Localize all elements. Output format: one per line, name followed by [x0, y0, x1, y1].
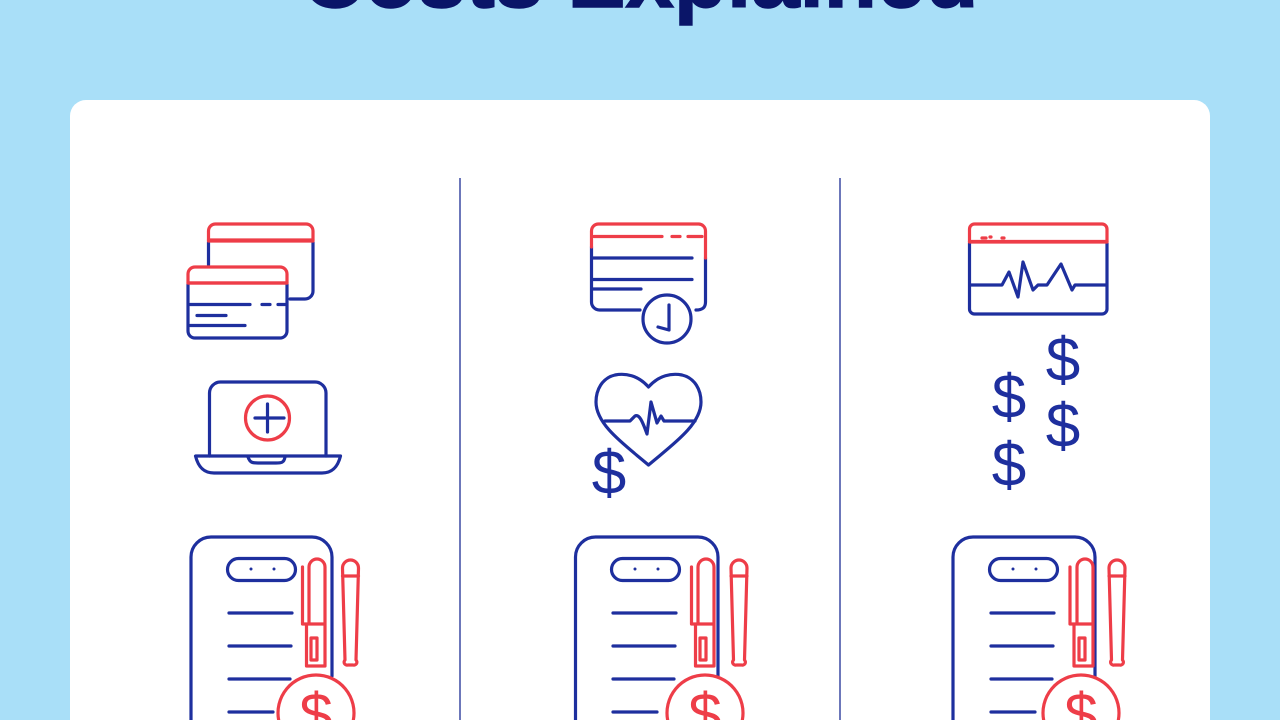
icon: clipboard with pen and dollar, column 1 [191, 537, 358, 720]
icon: overlapping credit cards [188, 224, 313, 338]
icon: laptop with medical plus [196, 382, 340, 473]
icon: clipboard with pen and dollar, column 2 [576, 537, 747, 720]
icon: heart with pulse and dollar: $ [592, 439, 626, 508]
icon: dollar signs: $ [992, 431, 1026, 500]
icon: monitor with pulse line [970, 224, 1107, 314]
icon: dollar signs: $ [1046, 392, 1080, 461]
icon: dollar signs: $ [992, 363, 1026, 432]
icon: dollar signs: $ [1046, 326, 1080, 395]
icon: bill with check mark [592, 224, 706, 343]
icon: heart with pulse and dollar [592, 374, 701, 508]
icon: dollar signs [992, 326, 1080, 500]
icon: clipboard with pen and dollar, column 3 [953, 537, 1125, 720]
panel: white card [70, 100, 1210, 720]
